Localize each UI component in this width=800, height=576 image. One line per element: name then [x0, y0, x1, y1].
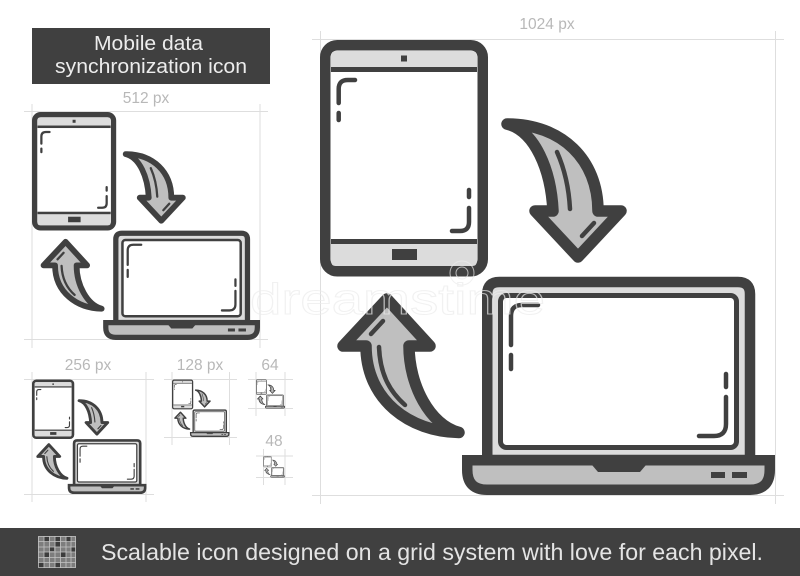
label: 512 px: 512 px [123, 90, 170, 107]
watermark: dreamstime [250, 275, 545, 324]
label: 1024 px: 1024 px [519, 16, 575, 33]
watermark [250, 261, 545, 324]
label: 48: 48 [265, 433, 283, 450]
label: 128 px: 128 px [177, 357, 224, 374]
label: 64: 64 [261, 357, 279, 374]
label: 256 px: 256 px [65, 357, 112, 374]
arrow: tablet to laptop [507, 124, 621, 257]
icon: 256 px [33, 381, 145, 493]
laptop lid [487, 282, 750, 460]
laptop base [467, 460, 770, 490]
grid frame: 128 px [164, 372, 237, 445]
laptop [467, 282, 770, 490]
title banner: Mobile data [94, 33, 204, 55]
icon: pixel grid [38, 536, 76, 568]
icon: large 1024 px [325, 45, 770, 490]
tablet [325, 45, 483, 271]
arrow: laptop to tablet [343, 299, 459, 432]
title banner [32, 28, 270, 84]
footer bar [0, 528, 800, 576]
grid frame: 256 px [24, 372, 154, 502]
grid frame: 1024 px [312, 31, 784, 504]
grid frame: 512 px [24, 104, 268, 348]
title banner: synchronization icon [55, 56, 247, 78]
icon: 64 px [256, 380, 285, 408]
footer caption: Scalable icon designed on a grid system with love for each pixel. [101, 539, 763, 565]
icon: 48 px [264, 456, 285, 477]
icon: 512 px [35, 115, 257, 337]
icon: 128 px [173, 380, 229, 436]
grid frame: 48 px [256, 449, 293, 485]
grid frame: 64 px [248, 372, 293, 416]
laptop screen [500, 296, 736, 448]
